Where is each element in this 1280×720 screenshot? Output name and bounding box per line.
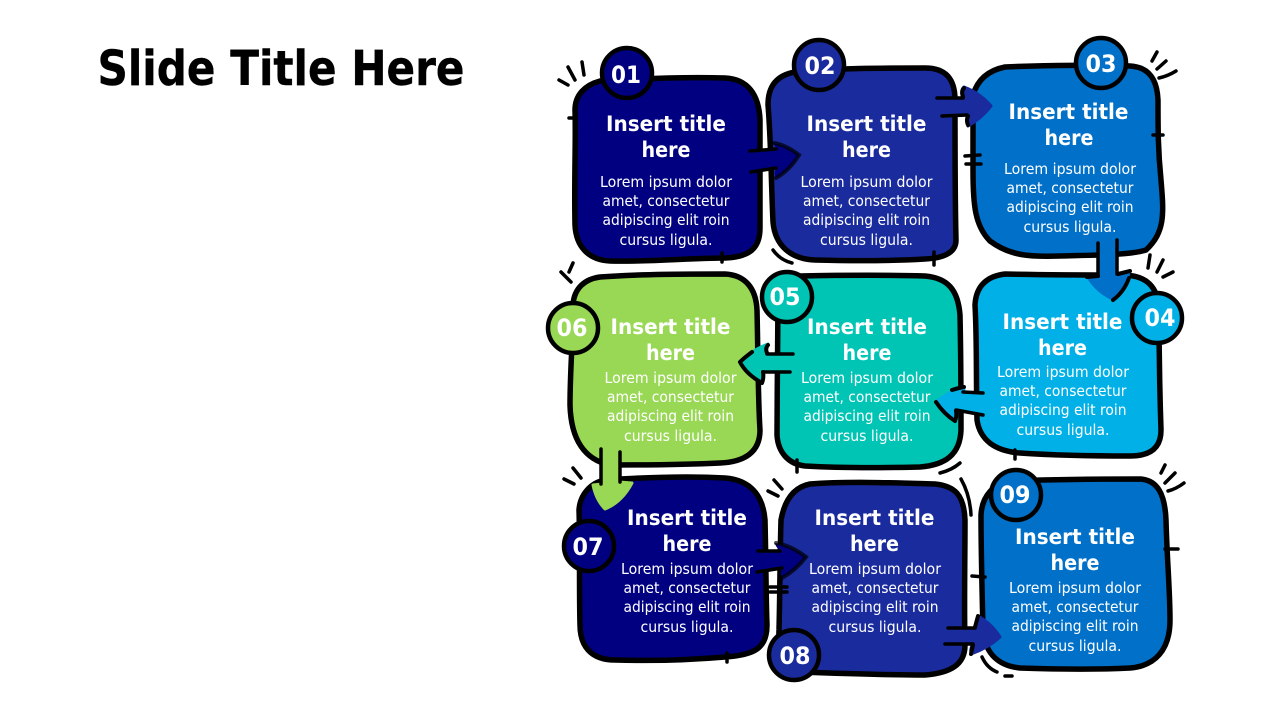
badge 06 <box>548 303 598 353</box>
text: card 6: amet, consectetur <box>607 388 735 406</box>
text: card 2: Lorem ipsum dolor <box>800 173 933 191</box>
text: card 3: amet, consectetur <box>1006 179 1134 197</box>
text: card 6 <box>604 315 737 445</box>
badge 08: 08 <box>780 642 810 670</box>
text: card 3: here <box>1044 126 1094 150</box>
text: card 4: here <box>1038 336 1087 360</box>
panel: card 5 box <box>777 275 961 468</box>
text: card 9: amet, consectetur <box>1012 598 1139 616</box>
text: card 2: amet, consectetur <box>803 192 931 210</box>
text: card 2 <box>800 112 933 249</box>
badge 02: 02 <box>804 52 836 80</box>
text: card 7 <box>621 506 754 636</box>
text: card 2: Insert title <box>806 112 926 136</box>
text: card 7: amet, consectetur <box>624 579 751 597</box>
badge 09: 09 <box>1000 481 1030 509</box>
text: card 8: Lorem ipsum dolor <box>809 560 942 578</box>
arrow: 6 to 7 <box>593 449 632 509</box>
text: card 6: Insert title <box>610 315 730 339</box>
panel: card 2 box <box>768 68 956 261</box>
arrow: 1 to 2 <box>750 143 799 178</box>
text: card 9: Insert title <box>1015 525 1135 549</box>
text: card 7: cursus ligula. <box>640 618 734 636</box>
arrow: 3 to 4 <box>1087 240 1130 300</box>
arrow: 5 to 6 <box>740 344 793 383</box>
text: card 1: Insert title <box>606 112 726 136</box>
arrow: 8 to 9 <box>945 616 1000 654</box>
text: card 9: adipiscing elit roin <box>1012 617 1138 635</box>
text: card 1 <box>600 112 733 249</box>
badge 05 <box>762 272 812 322</box>
text: card 1: cursus ligula. <box>620 231 712 249</box>
badge 05: 05 <box>770 283 800 311</box>
panel: card 6 box <box>570 274 760 465</box>
title: Slide Title Here <box>98 41 464 97</box>
text: card 6: cursus ligula. <box>624 427 717 445</box>
text: card 6: adipiscing elit roin <box>607 407 734 425</box>
arrow: 7 to 8 <box>757 543 806 578</box>
text: card 5: Insert title <box>807 315 927 339</box>
text: card 9: Lorem ipsum dolor <box>1009 579 1142 597</box>
text: card 3: cursus ligula. <box>1024 218 1116 236</box>
text: card 5: amet, consectetur <box>804 388 931 406</box>
text: card 9: here <box>1050 551 1100 575</box>
text: card 8: adipiscing elit roin <box>812 598 938 616</box>
text: card 9 <box>1009 525 1142 655</box>
panel: card 7 box <box>579 477 767 660</box>
text: card 4 <box>997 310 1130 439</box>
badge 02 <box>794 40 844 90</box>
text: card 4: cursus ligula. <box>1016 421 1110 439</box>
badge 06: 06 <box>556 314 588 342</box>
text: card 8: here <box>850 532 899 556</box>
badge 01 <box>602 48 652 98</box>
text: card 8: Insert title <box>814 506 934 530</box>
text: card 8: amet, consectetur <box>812 579 939 597</box>
text: card 6: Lorem ipsum dolor <box>604 369 737 387</box>
text: card 1: amet, consectetur <box>602 192 730 210</box>
badge 03 <box>1076 38 1126 88</box>
badge 04: 04 <box>1144 304 1176 332</box>
text: card 4: amet, consectetur <box>1000 382 1127 400</box>
decorative sketch ticks <box>559 52 1184 676</box>
text: card 5: adipiscing elit roin <box>804 407 930 425</box>
text: card 4: Insert title <box>1002 310 1122 334</box>
badge 01: 01 <box>611 61 641 89</box>
text: card 1: Lorem ipsum dolor <box>600 173 733 191</box>
text: card 3 <box>1004 100 1137 236</box>
text: card 3: Insert title <box>1008 100 1128 124</box>
badge 07: 07 <box>572 533 604 561</box>
panel: card 3 box <box>973 65 1163 256</box>
text: card 8: cursus ligula. <box>828 618 922 636</box>
arrow: 2 to 3 <box>937 87 991 126</box>
badge 03: 03 <box>1086 50 1116 78</box>
text: card 2: here <box>842 138 891 162</box>
text: card 4: adipiscing elit roin <box>1000 401 1126 419</box>
arrow: 4 to 5 <box>936 387 983 421</box>
badge 08 <box>769 630 819 680</box>
text: card 5: Lorem ipsum dolor <box>801 369 934 387</box>
panel: card 1 box <box>575 78 760 261</box>
badge 07 <box>564 521 614 571</box>
text: card 3: adipiscing elit roin <box>1006 198 1134 216</box>
panel: card 8 box <box>779 482 965 675</box>
text: card 9: cursus ligula. <box>1028 637 1122 655</box>
text: card 6: here <box>646 341 695 365</box>
text: card 7: here <box>662 532 712 556</box>
text: card 4: Lorem ipsum dolor <box>997 363 1130 381</box>
text: card 7: adipiscing elit roin <box>624 598 750 616</box>
badge 04 <box>1132 293 1182 343</box>
text: card 1: here <box>642 138 690 162</box>
text: card 5 <box>801 315 934 445</box>
text: card 5: here <box>842 341 892 365</box>
text: card 2: cursus ligula. <box>820 231 913 249</box>
text: card 2: adipiscing elit roin <box>803 211 930 229</box>
text: card 7: Lorem ipsum dolor <box>621 560 754 578</box>
badge 09 <box>991 470 1041 520</box>
text: card 3: Lorem ipsum dolor <box>1004 160 1137 178</box>
panel: card 4 box <box>975 274 1161 456</box>
text: card 7: Insert title <box>627 506 747 530</box>
text: card 1: adipiscing elit roin <box>602 211 730 229</box>
text: card 8 <box>809 506 942 636</box>
text: card 5: cursus ligula. <box>820 427 914 445</box>
panel: card 9 box <box>981 479 1170 669</box>
